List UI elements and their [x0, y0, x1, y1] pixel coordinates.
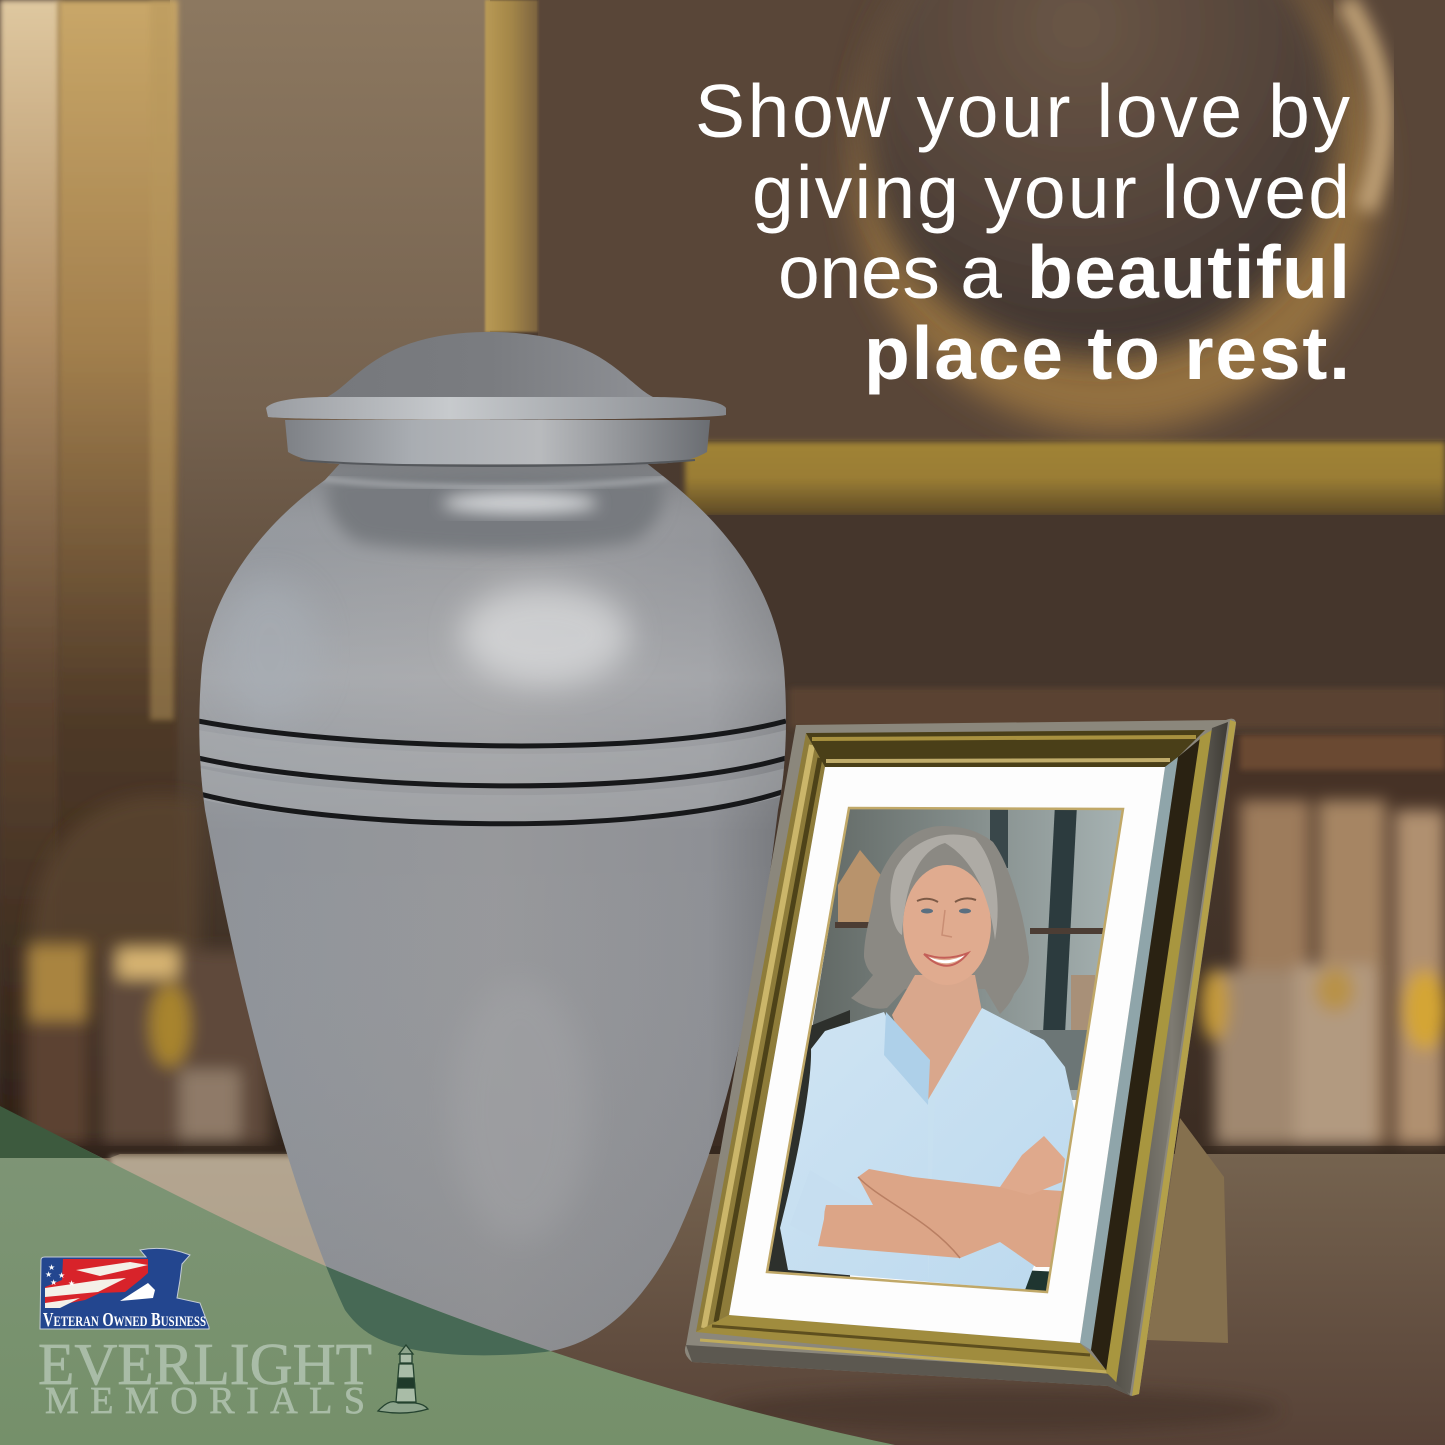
- frame left moulding: [696, 733, 825, 1332]
- green corner overlay: [0, 1106, 894, 1445]
- urn neck: [285, 420, 710, 464]
- woman smile: [928, 955, 965, 964]
- headline: Show your love by: [695, 69, 1350, 153]
- urn collar: [327, 468, 663, 552]
- frame top moulding: [806, 730, 1205, 767]
- photo: [760, 808, 1123, 1296]
- urn engraved bands: [198, 721, 786, 824]
- everlight memorials logo: [38, 1331, 372, 1422]
- badge silhouette: [40, 1248, 209, 1329]
- woman crossed arms: [818, 1169, 1062, 1267]
- badge stars: ★: [45, 1270, 52, 1279]
- headline: place to rest.: [864, 311, 1350, 395]
- headline: [695, 69, 1350, 395]
- badge stars: [45, 1263, 75, 1288]
- frame white mat: [729, 767, 1165, 1343]
- woman sleeve cuff: [824, 1205, 826, 1212]
- badge stars: ★: [50, 1278, 57, 1287]
- headline: beautiful: [1027, 230, 1350, 314]
- badge flag: [45, 1259, 148, 1308]
- badge stars: ★: [48, 1263, 55, 1272]
- urn body: [190, 450, 800, 1360]
- veteran owned business badge: [40, 1248, 209, 1331]
- badge stars: ★: [68, 1279, 75, 1288]
- lighthouse icon: [378, 1345, 428, 1413]
- urn lid: [325, 332, 655, 398]
- urn seen through overlay: [326, 1266, 550, 1356]
- woman eyes: [921, 908, 971, 914]
- frame bottom moulding: [696, 1315, 1110, 1374]
- badge caption: VETERAN OWNED BUSINESS: [43, 1309, 206, 1331]
- everlight memorials logo: MEMORIALS: [45, 1380, 365, 1422]
- frame silver outer edge: [685, 719, 1236, 1396]
- urn lid rim: [266, 397, 726, 420]
- woman neck: [892, 975, 982, 1105]
- logo wordmark: EVERLIGHT: [38, 1331, 372, 1397]
- frame right moulding: [1080, 757, 1178, 1350]
- blurred shelf items right: [1201, 800, 1445, 1145]
- urn: [190, 332, 800, 1360]
- wooden table: [0, 1154, 1445, 1445]
- blurred shelf items left: [25, 795, 270, 1145]
- headline: ones a: [778, 230, 1002, 314]
- photo gold bevel: [767, 808, 1123, 1292]
- frame stand: [1147, 1118, 1228, 1343]
- woman hair back: [851, 826, 1029, 1014]
- headline: giving your loved: [752, 150, 1350, 234]
- photo backdrop: [760, 808, 1123, 1296]
- badge stars: ★: [58, 1271, 65, 1280]
- woman face: [903, 865, 991, 985]
- picture frame: [685, 719, 1236, 1396]
- woman shirt: [780, 1008, 1075, 1290]
